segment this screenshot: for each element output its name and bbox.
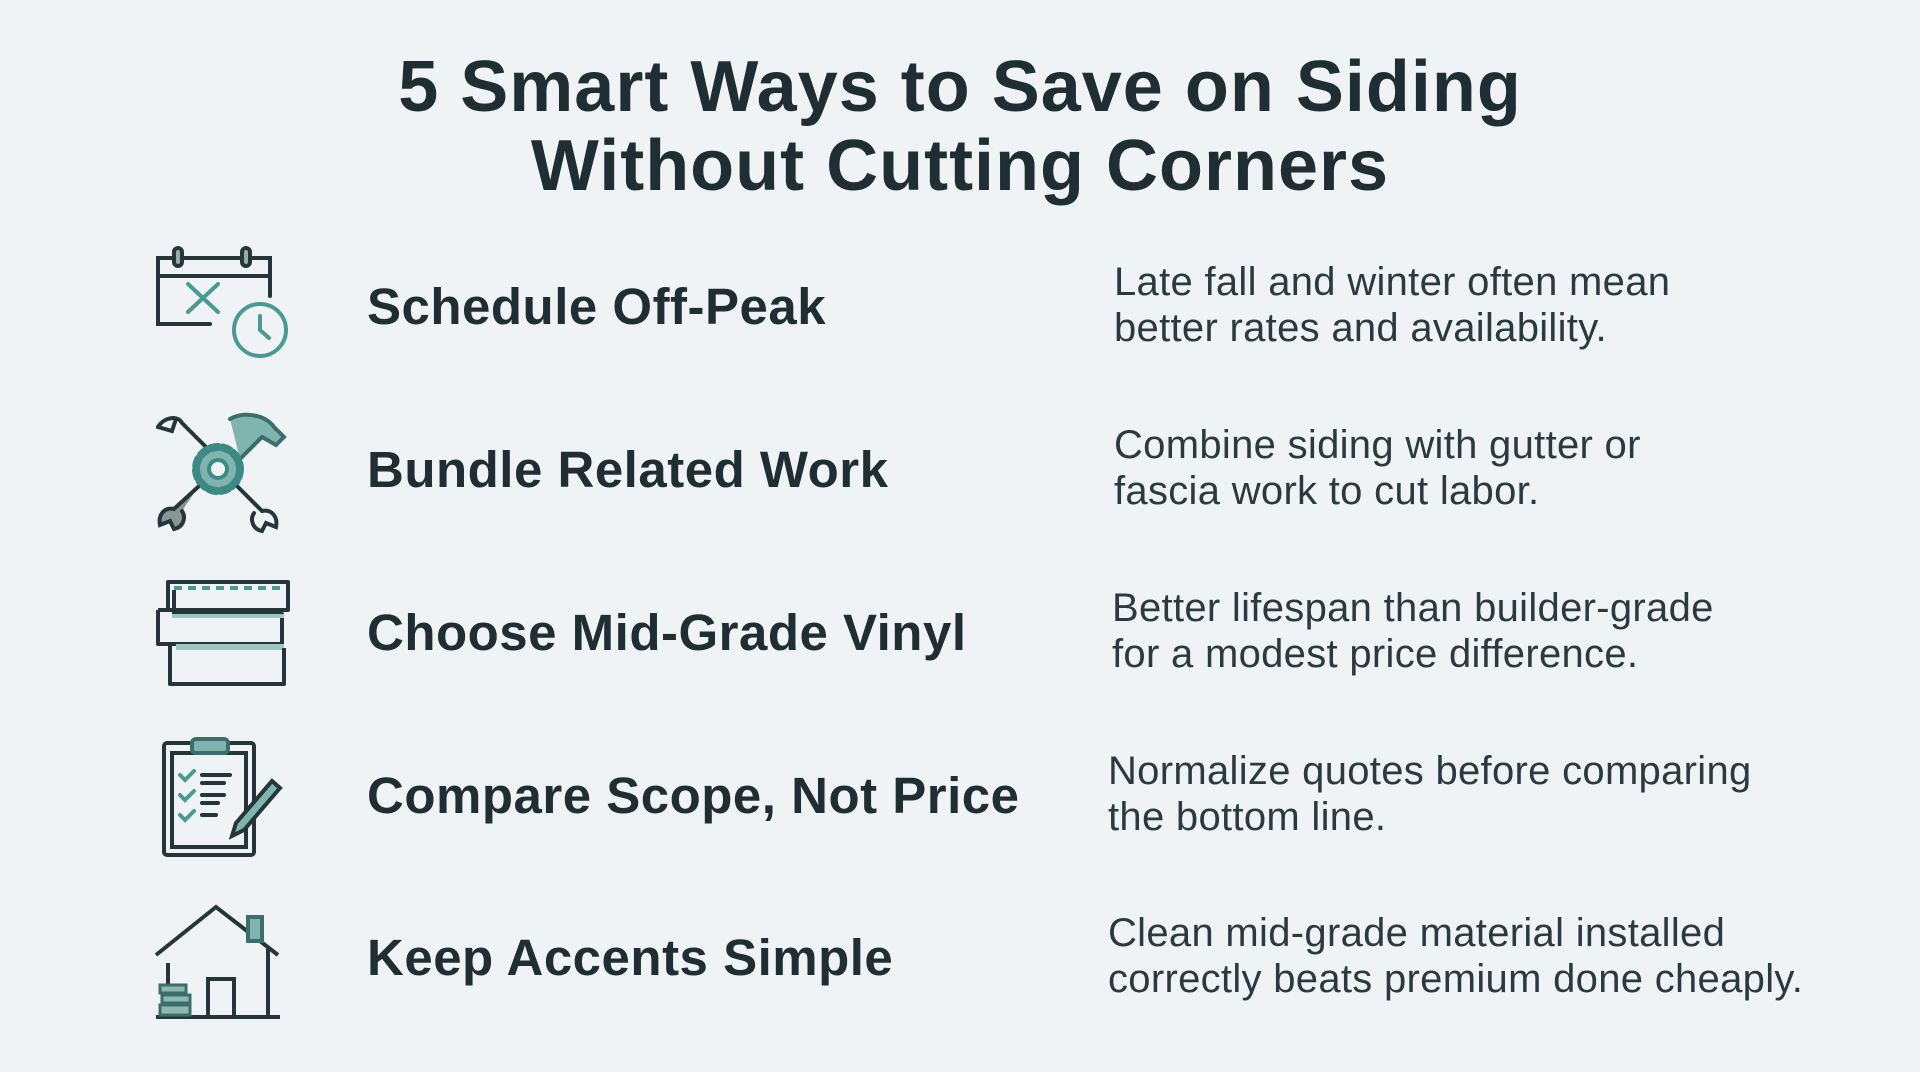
row 2: bundle related work: [156, 412, 1641, 534]
title: 5 Smart Ways to Save on Siding: [398, 47, 1522, 127]
description: fascia work to cut labor.: [1114, 469, 1539, 513]
description: [1108, 749, 1752, 839]
title: [398, 47, 1522, 206]
icon: tools and gear: [156, 412, 287, 534]
description: [1108, 911, 1803, 1001]
icon: clipboard checklist: [162, 737, 283, 857]
heading: Schedule Off-Peak: [367, 278, 826, 335]
heading: Keep Accents Simple: [367, 929, 893, 986]
title: Without Cutting Corners: [531, 126, 1389, 206]
description: for a modest price difference.: [1112, 632, 1638, 676]
description: [1114, 260, 1670, 350]
description: [1112, 586, 1714, 676]
description: better rates and availability.: [1114, 306, 1607, 350]
row 3: mid-grade vinyl: [156, 580, 1714, 686]
description: correctly beats premium done cheaply.: [1108, 957, 1803, 1001]
heading: Compare Scope, Not Price: [367, 767, 1020, 824]
description: Clean mid-grade material installed: [1108, 911, 1725, 955]
icon: calendar clock: [156, 246, 288, 358]
icon: house: [154, 904, 280, 1019]
heading: Bundle Related Work: [367, 441, 888, 498]
row 5: keep accents simple: [154, 904, 1803, 1019]
description: the bottom line.: [1108, 795, 1386, 839]
description: Combine siding with gutter or: [1114, 423, 1641, 467]
icon: siding panels: [156, 580, 290, 686]
description: Normalize quotes before comparing: [1108, 749, 1752, 793]
row 1: schedule off-peak: [156, 246, 1670, 358]
description: Late fall and winter often mean: [1114, 260, 1670, 304]
description: [1114, 423, 1641, 513]
description: Better lifespan than builder-grade: [1112, 586, 1714, 630]
row 4: compare scope: [162, 737, 1752, 857]
heading: Choose Mid-Grade Vinyl: [367, 604, 966, 661]
